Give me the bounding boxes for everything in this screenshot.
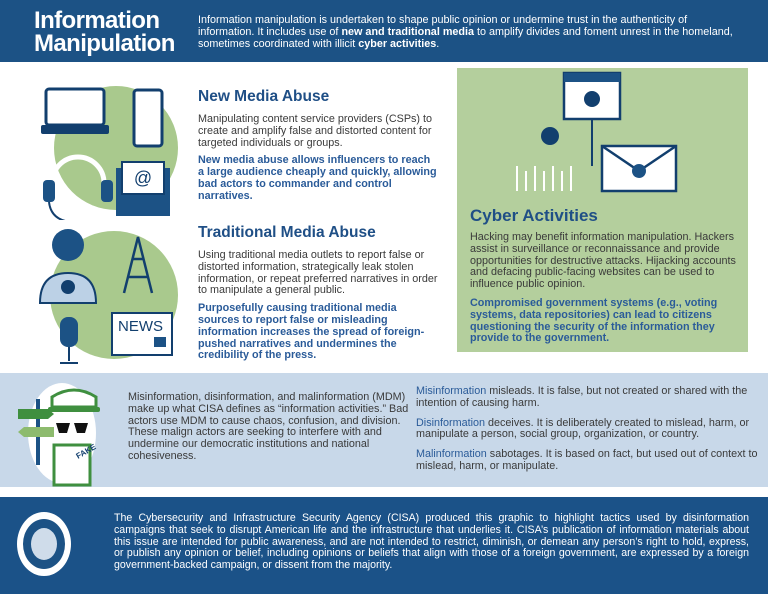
icon: disguise: FAKE	[74, 442, 98, 461]
panel: new media abuse: New Media Abuse	[198, 88, 329, 105]
title: Manipulation	[34, 30, 175, 57]
text: definitions	[416, 385, 758, 472]
panel: traditional media abuse	[198, 224, 438, 361]
intro text: Information manipulation is undertaken to shape public opinion or undermine trust in the authenticity of information. It includes use of new and traditional media to amplify divides and foment unrest in the homeland, sometimes coordinated with illicit cyber activities.	[198, 14, 733, 50]
header	[0, 0, 768, 62]
panel: cyber activities: Hacking may benefit information manipulation. Hackers assist in surveillance or reconnaissance and provide opportunities for destructive attacks. Hijacking accounts and defacing public-facing websites can be used to influence public opinion.	[470, 231, 736, 290]
panel: cyber activities	[457, 68, 748, 352]
icon: traditional media: NEWS	[118, 318, 163, 335]
text: definitions: Malinformation sabotages. It is based on fact, but used out of context to mislead, harm, or manipulate.	[416, 448, 758, 472]
icon: cyber	[516, 72, 678, 192]
title	[34, 7, 175, 57]
icon: disguise	[18, 383, 100, 486]
panel: cyber activities: Cyber Activities	[470, 206, 598, 225]
icon: CISA seal	[17, 512, 71, 576]
text: disclaimer: The Cybersecurity and Infrastructure Security Agency (CISA) produced this graphic to highlight tactics used by disinformation campaigns that seek to disrupt American life and the infrastructure that underlies it. CISA’s publication of information materials about this issue are intended for public awareness, and are not intended to restrict, diminish, or demean any person’s right to hold, express, or publish any opinion or belief, including opinions or beliefs that align with those of a foreign government, are expressed by a foreign government-backed campaign, or dissent from the majority.	[114, 512, 749, 571]
icon: traditional media	[39, 229, 178, 364]
panel: new media abuse: New media abuse allows influencers to reach a large audience cheaply and quickly, allowing bad actors to commander and control narratives.	[198, 154, 437, 202]
text: definitions: Disinformation deceives. It is deliberately created to mislead, harm, or manipulate a person, social group, organization, or country.	[416, 417, 749, 440]
panel: cyber activities: Compromised government systems (e.g., voting systems, data repositories) can lead to citizens questioning the security of the information they provide to the government.	[470, 297, 717, 344]
icon: new media devices: @	[134, 168, 152, 188]
band: MDM	[0, 373, 768, 487]
panel: new media abuse: Manipulating content service providers (CSPs) to create and amplify false and distorted content for targeted individuals or groups.	[198, 113, 432, 149]
text: MDM description: Misinformation, disinformation, and malinformation (MDM) make up what CISA defines as “information activities.” Bad actors use MDM to cause chaos, confusion, and division. These malign actors are seeking to interfere with and undermine our democratic institutions and national cohesiveness.	[128, 391, 408, 462]
panel: new media abuse	[198, 88, 437, 202]
text: definitions: Misinformation misleads. It is false, but not created or shared with the intention of causing harm.	[416, 385, 747, 409]
panel: traditional media abuse: Traditional Media Abuse	[198, 224, 376, 241]
panel: traditional media abuse: Purposefully causing traditional media sources to report false or misleading information increases the spread of foreign-pushed narratives and undermines the credibility of the press.	[198, 302, 424, 361]
panel: traditional media abuse: Using traditional media outlets to report false or distorted information, strategically leak stolen information, or repeat preferred narratives in order to manipulate a general public.	[198, 249, 437, 296]
title: Information	[34, 7, 159, 34]
icon: new media devices	[41, 86, 178, 220]
footer	[0, 497, 768, 594]
